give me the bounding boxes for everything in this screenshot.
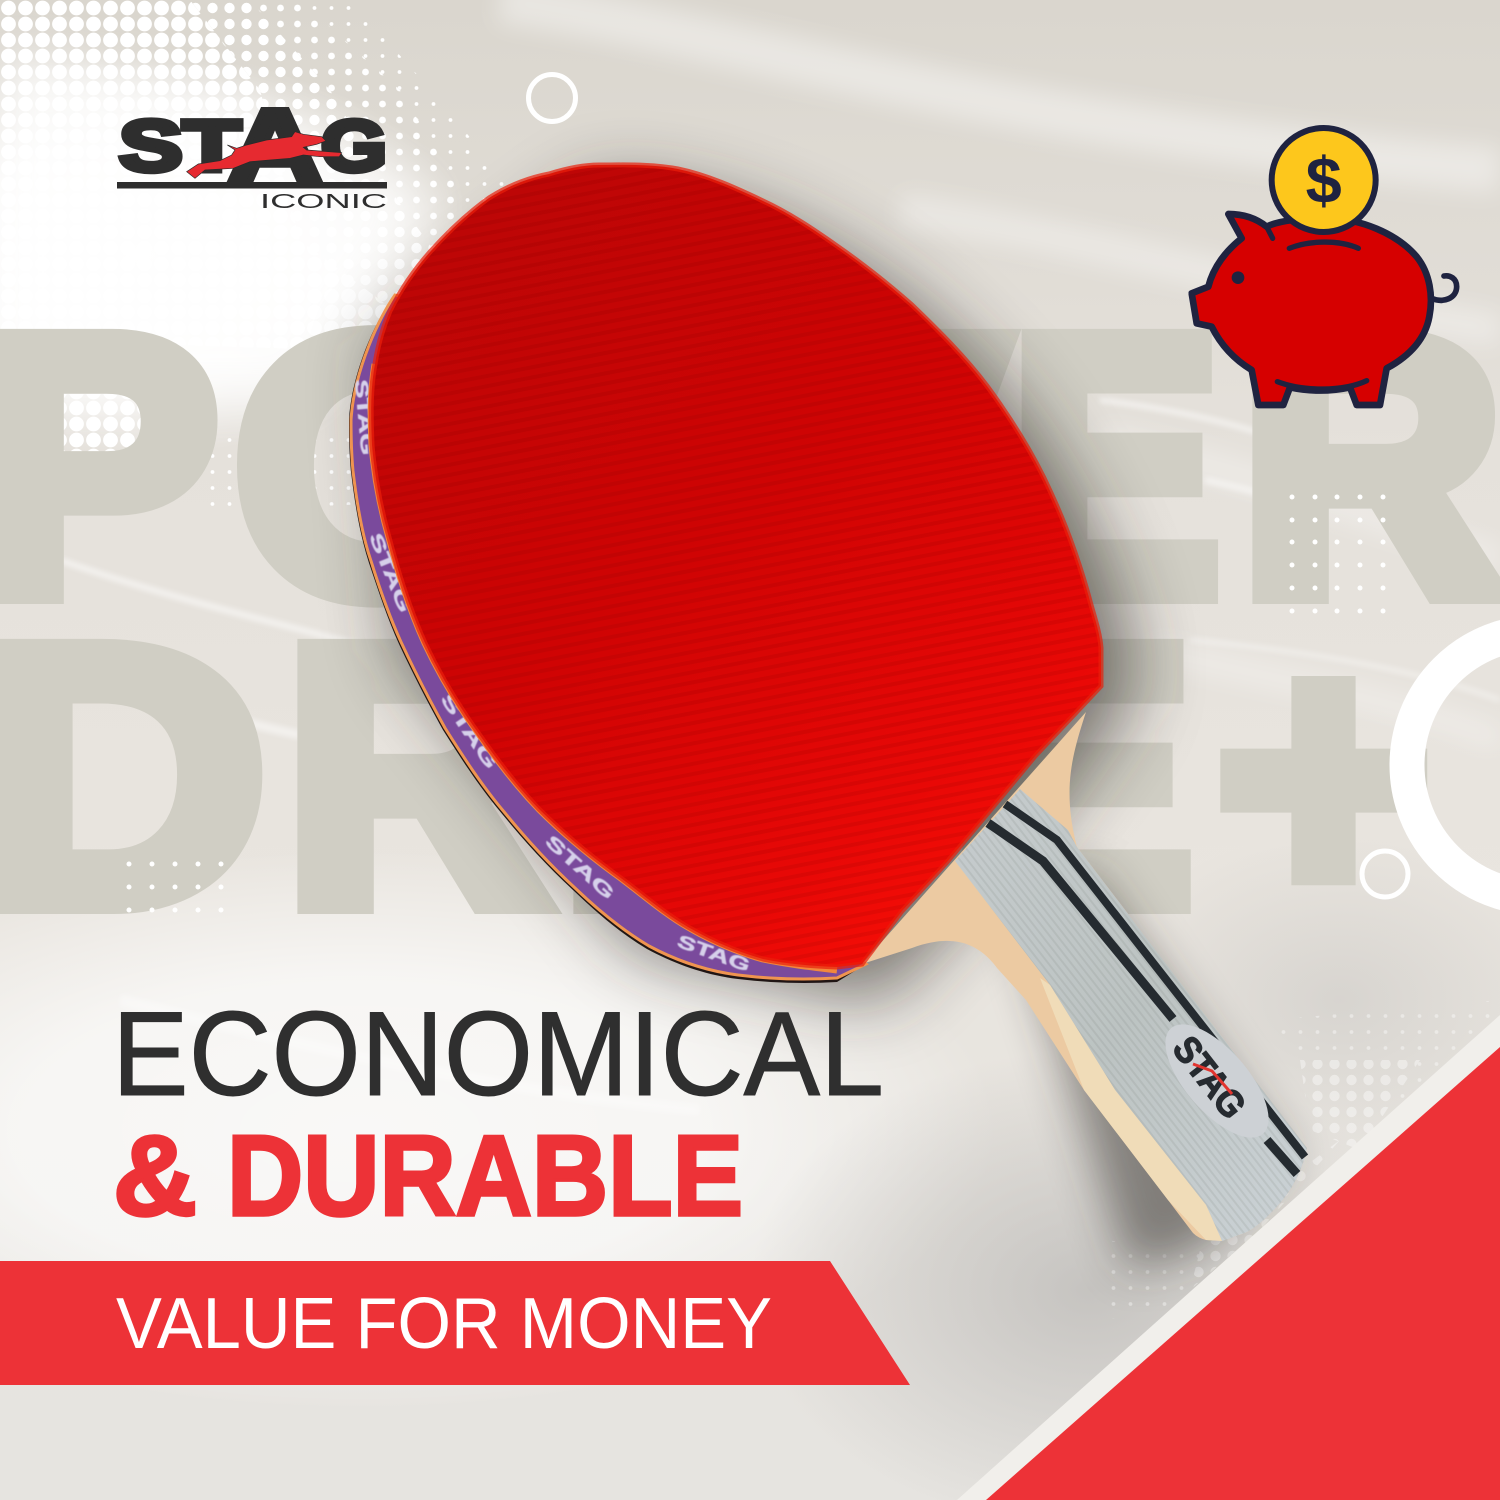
side edge logos: STAG — [351, 379, 378, 456]
side edge logos — [351, 379, 753, 976]
icon: leaping greyhound — [187, 132, 342, 178]
heading: & DURABLE: & — [113, 1113, 197, 1240]
racket handle — [862, 712, 1307, 1241]
dots over the letters — [126, 494, 1386, 912]
heading: ECONOMICAL: ECONOMICAL — [112, 987, 884, 1121]
banner text: VALUE FOR MONEY — [116, 1284, 772, 1364]
decorative ring: large right — [1407, 632, 1500, 898]
racket rubber face — [371, 165, 1101, 967]
coin — [1272, 128, 1376, 232]
table tennis racket — [349, 165, 1307, 1241]
background headline: POWER — [0, 263, 1500, 670]
racket side edge with purple sponge — [349, 295, 866, 983]
logo wordmark — [119, 86, 387, 207]
racket shadow — [380, 185, 1290, 1270]
halftone dots: lower right — [1100, 1000, 1500, 1320]
side edge logos: STAG — [437, 690, 501, 773]
background headline: DRIVE+: I — [561, 573, 662, 980]
decorative ring: top — [528, 74, 576, 122]
background headline: POWER: E — [1011, 263, 1220, 670]
background headline: DRIVE+: V — [660, 573, 905, 980]
side edge logos: STAG — [365, 530, 415, 615]
background headline: POWER: R — [1240, 263, 1500, 670]
red corner triangle — [957, 1015, 1500, 1500]
pig body — [1192, 214, 1431, 405]
logo sub-brand: ICONIC — [260, 191, 387, 213]
decorative ring: small right — [1362, 851, 1408, 897]
background headline: DRIVE+ — [0, 573, 1430, 980]
background headline: DRIVE+: R — [285, 573, 548, 980]
dollar sign: $ — [1306, 144, 1342, 217]
orange edge of rubber — [371, 364, 837, 970]
logo wordmark: G — [321, 107, 387, 187]
side edge logos: STAG — [675, 931, 753, 976]
background headline: DRIVE+: + — [1217, 573, 1430, 980]
background headline: POWER: O — [234, 263, 518, 670]
background headline: DRIVE+: E — [950, 573, 1193, 980]
banner: value for money — [0, 1261, 910, 1385]
icon: piggy bank with coin — [1192, 128, 1457, 405]
handle logo: STAG — [1164, 1029, 1254, 1127]
background headline: POWER: W — [510, 263, 1005, 670]
logo wordmark: A — [226, 86, 324, 207]
heading: & DURABLE: DURABLE — [227, 1113, 743, 1240]
logo: STAG ICONIC — [117, 86, 387, 213]
logo wordmark: ST — [119, 107, 241, 187]
halftone dots: top left — [0, 0, 520, 510]
side edge logos: STAG — [541, 831, 619, 904]
